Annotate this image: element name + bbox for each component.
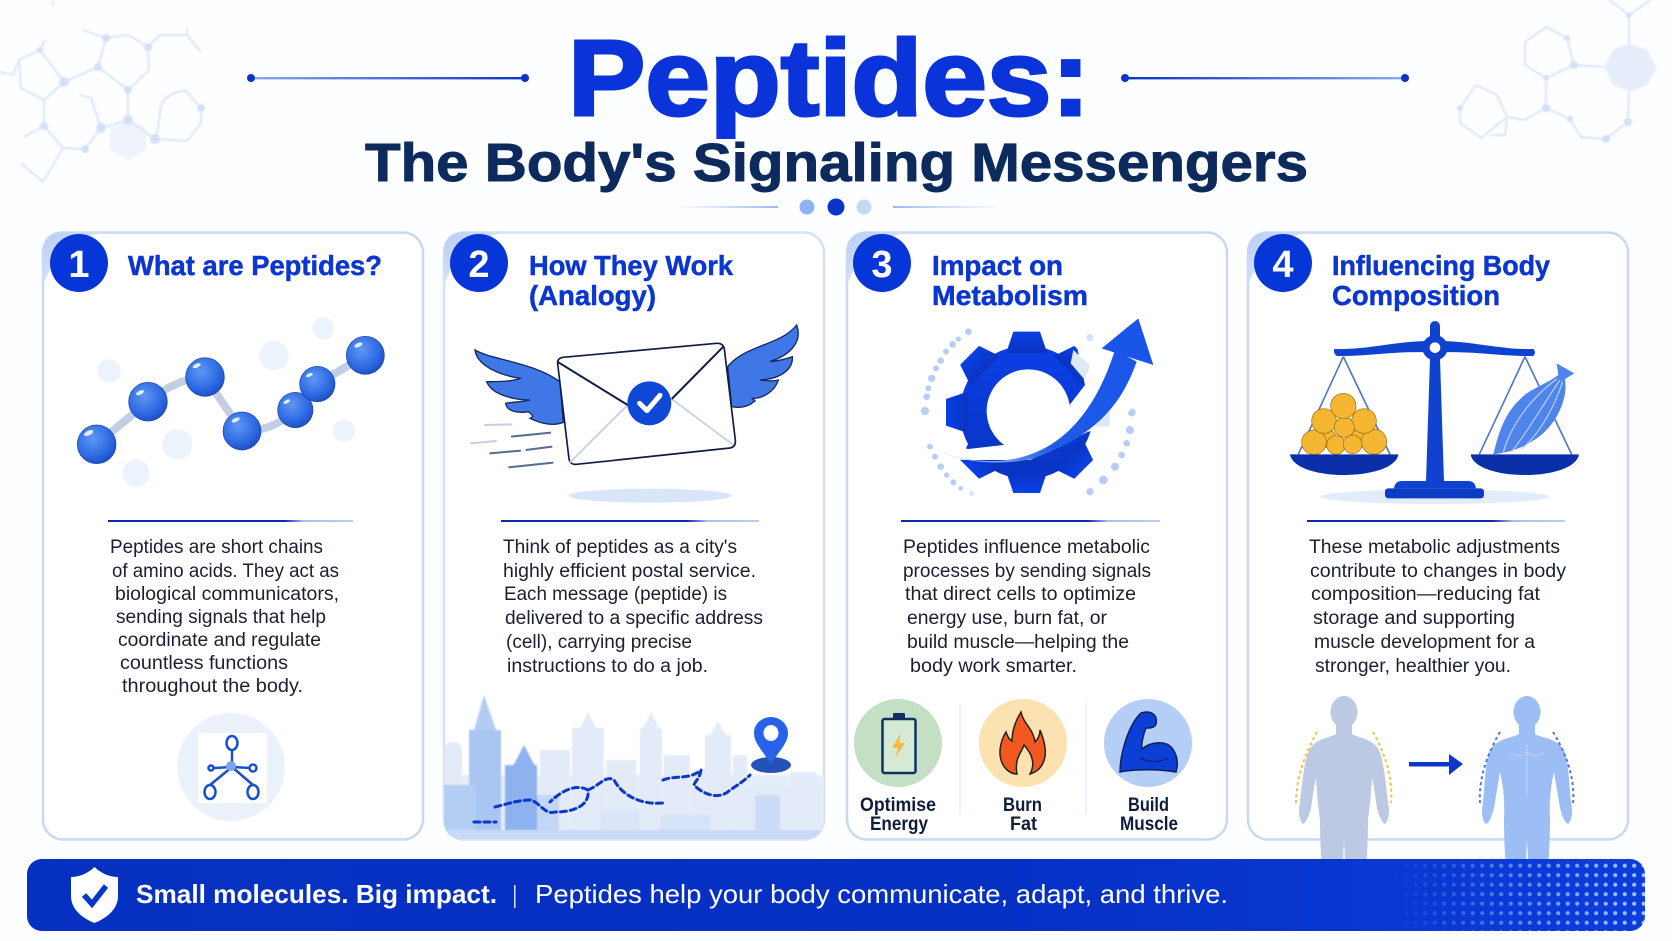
left title ornament line: [247, 74, 529, 82]
silhouette: after: [1480, 696, 1573, 880]
bottom banner: [27, 859, 1645, 931]
icon: shield with check: [71, 867, 118, 923]
label: build muscle: Build: [1128, 795, 1169, 816]
heading 3: Metabolism: [932, 280, 1088, 311]
heading 4: [1332, 250, 1550, 311]
body text 1: of amino acids. They act as: [112, 561, 339, 582]
body text 2: (cell), carrying precise: [506, 632, 692, 653]
label: build muscle: Muscle: [1120, 814, 1178, 835]
decorative molecule top right: [1457, 0, 1657, 143]
number badge 4: 4: [1272, 244, 1294, 286]
panel: impact on metabolism: [847, 232, 1227, 840]
divider 4: [1307, 520, 1565, 522]
body text 4: storage and supporting: [1313, 608, 1515, 629]
body text 4: stronger, healthier you.: [1315, 656, 1511, 677]
subtitle: The Body's Signaling Messengers: [365, 133, 1308, 193]
label: burn fat: Fat: [1010, 814, 1038, 835]
balance scale illustration: [1290, 321, 1579, 504]
arrow: before to after: [1409, 754, 1463, 775]
body text 2: delivered to a specific address: [505, 608, 763, 629]
peptide chain illustration: [77, 317, 384, 487]
body text 1: throughout the body.: [122, 676, 303, 697]
body text 3: that direct cells to optimize: [905, 584, 1136, 605]
body text 3: processes by sending signals: [903, 561, 1151, 582]
panel: how they work: [444, 232, 824, 842]
panel: what are peptides: [43, 232, 423, 840]
label: burn fat: Burn: [1003, 795, 1042, 816]
city skyline with delivery route: [444, 695, 824, 842]
body text 2: [503, 537, 763, 677]
body text 1: sending signals that help: [116, 607, 326, 628]
number badge 4: [1254, 234, 1312, 292]
body text 2: Think of peptides as a city's: [503, 537, 737, 558]
icon: location pin: [751, 717, 791, 773]
heading 4: Influencing Body: [1332, 250, 1550, 281]
heading 3: [932, 250, 1088, 311]
heading 2: How They Work: [529, 250, 733, 281]
body text 4: composition—reducing fat: [1311, 584, 1541, 605]
small molecule icon: [177, 713, 285, 821]
body text 3: energy use, burn fat, or: [907, 608, 1108, 629]
heading 2: (Analogy): [529, 280, 656, 311]
body text 4: These metabolic adjustments: [1309, 537, 1560, 558]
number badge 1: 1: [68, 244, 90, 286]
divider 2: [501, 520, 759, 522]
label: optimise energy: [860, 795, 936, 835]
icon: bicep, build muscle: [1104, 699, 1192, 787]
body text 4: contribute to changes in body: [1310, 561, 1567, 582]
number badge 1: [50, 234, 108, 292]
label: burn fat: [1003, 795, 1042, 835]
panel: influencing body composition: [1248, 232, 1628, 880]
flying envelope illustration: [470, 325, 798, 503]
banner bold message: Small molecules. Big impact.: [136, 879, 497, 909]
number badge 3: [853, 234, 911, 292]
banner message: Peptides help your body communicate, adapt, and thrive.: [535, 879, 1228, 909]
silhouette: before: [1296, 696, 1391, 880]
body text 1: Peptides are short chains: [110, 537, 323, 558]
divider 3: [901, 520, 1160, 522]
body text 1: coordinate and regulate: [118, 630, 321, 651]
body text 3: build muscle—helping the: [907, 632, 1129, 653]
heading 2: [529, 250, 733, 311]
body text 3: [903, 537, 1151, 677]
number badge 2: [450, 234, 508, 292]
subtitle ornament dots: [669, 198, 1006, 216]
body text 3: Peptides influence metabolic: [903, 537, 1150, 558]
body text 2: Each message (peptide) is: [504, 584, 727, 605]
icon: flame, burn fat: [979, 699, 1067, 787]
heading 1: What are Peptides?: [128, 250, 382, 281]
right title ornament line: [1121, 74, 1409, 82]
label: build muscle: [1120, 795, 1178, 835]
body text 1: countless functions: [120, 653, 288, 674]
body text 3: body work smarter.: [910, 656, 1077, 677]
divider 1: [108, 520, 353, 522]
body text 4: [1309, 537, 1567, 677]
body text 2: highly efficient postal service.: [503, 561, 756, 582]
decorative molecule top left: [0, 0, 205, 182]
body text 1: biological communicators,: [115, 584, 339, 605]
gear and rising arrow illustration: [921, 318, 1160, 496]
label: optimise energy: Optimise: [860, 795, 936, 816]
heading 3: Impact on: [932, 250, 1063, 281]
number badge 3: 3: [871, 244, 893, 286]
title: Peptides: Peptides:: [568, 17, 1090, 138]
label: optimise energy: Energy: [870, 814, 928, 835]
body text 4: muscle development for a: [1314, 632, 1535, 653]
body text 1: [110, 537, 339, 697]
heading 4: Composition: [1332, 280, 1500, 311]
number badge 2: 2: [468, 244, 490, 286]
icon: battery, optimise energy: [854, 699, 942, 787]
body text 2: instructions to do a job.: [507, 656, 708, 677]
